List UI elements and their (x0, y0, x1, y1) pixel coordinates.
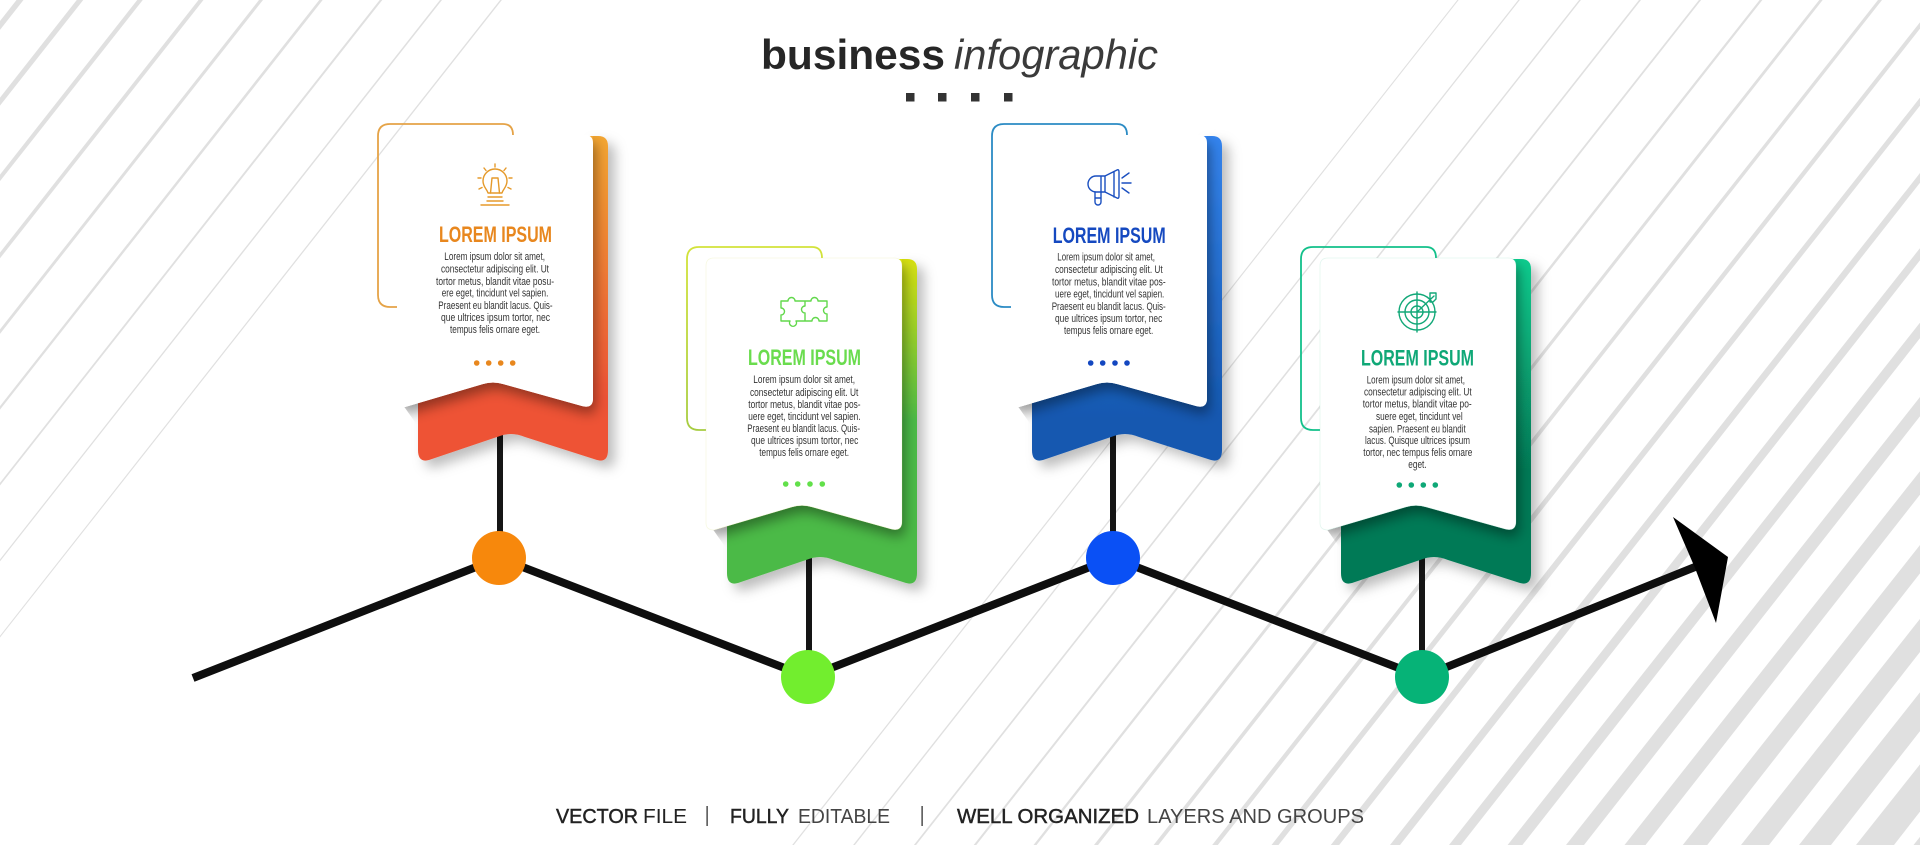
dots 4 (1396, 482, 1438, 488)
card 2 shadow on ribbon (706, 258, 902, 530)
footer text: WELL ORGANIZED (957, 806, 1139, 828)
card 4 shadow on ribbon (1320, 258, 1516, 530)
body text 2: tortor metus, blandit vitae pos- (748, 399, 861, 411)
icon: light bulb (478, 164, 512, 205)
body text 4: Lorem ipsum dolor sit amet, (1367, 374, 1465, 386)
icon: puzzle (781, 298, 827, 326)
card 3 shadow on ribbon (1011, 135, 1207, 407)
title: infographic (954, 31, 1158, 78)
ribbon 1 (418, 136, 608, 461)
node 2 (781, 650, 835, 704)
footer text: EDITABLE (798, 806, 890, 828)
connector stem 2 (806, 553, 812, 663)
body text 3: tortor metus, blandit vitae pos- (1052, 277, 1166, 289)
body text 1: tortor metus, blandit vitae posu- (436, 276, 554, 288)
white card 2 (706, 258, 902, 530)
heading 1: LOREM IPSUM (439, 222, 552, 247)
body text 4: tortor, nec tempus felis ornare (1363, 447, 1472, 459)
panel: step 3 blue (992, 124, 1222, 585)
body text 2: Praesent eu blandit lacus. Quis- (747, 423, 860, 435)
title dots (906, 93, 1012, 102)
footer text: FILE (643, 806, 687, 828)
body text 3: Praesent eu blandit lacus. Quis- (1052, 301, 1166, 313)
dots 2 (783, 481, 825, 487)
body text 2 (747, 374, 861, 459)
white card 1 (397, 135, 593, 407)
outline frame 1 (378, 124, 513, 307)
node 3 (1086, 531, 1140, 585)
timeline zigzag line (193, 558, 1695, 678)
body text 4: suere eget, tincidunt vel (1376, 411, 1463, 423)
outline frame 4 (1301, 247, 1436, 430)
outline frame 2 (687, 247, 822, 430)
card 1 shadow on ribbon (397, 135, 593, 407)
heading 4: LOREM IPSUM (1361, 346, 1474, 371)
body text 1: Praesent eu blandit lacus. Quis- (438, 300, 553, 312)
body text 2: tempus felis ornare eget. (759, 447, 849, 459)
node 1 (472, 531, 526, 585)
footer text: VECTOR (556, 806, 638, 828)
ribbon 2 (727, 259, 917, 584)
white card 3 (1011, 135, 1207, 407)
footer text: LAYERS AND GROUPS (1147, 806, 1364, 828)
panel: step 1 orange (378, 124, 608, 585)
body text 4: tortor metus, blandit vitae po- (1363, 399, 1472, 411)
connector stem 3 (1110, 430, 1116, 540)
body text 4 (1363, 374, 1472, 471)
ribbon 3 (1032, 136, 1222, 461)
body text 3: consectetur adipiscing elit. Ut (1055, 264, 1163, 276)
body text 1: tempus felis ornare eget. (450, 324, 540, 336)
body text 4: eget. (1408, 459, 1427, 471)
footer text: FULLY (730, 806, 789, 828)
heading 3: LOREM IPSUM (1053, 223, 1166, 248)
body text 1: Lorem ipsum dolor sit amet, (444, 251, 545, 263)
body text 2: Lorem ipsum dolor sit amet, (753, 374, 855, 386)
icon: target (1398, 292, 1436, 332)
body text 2: uere eget, tincidunt vel sapien. (748, 411, 861, 423)
outline frame 3 (992, 124, 1127, 307)
body text 4: consectetur adipiscing elit. Ut (1364, 387, 1472, 399)
body text 1: ere eget, tincidunt vel sapien. (442, 288, 548, 300)
node 4 (1395, 650, 1449, 704)
body text 2: consectetur adipiscing elit. Ut (750, 387, 858, 399)
body text 3 (1052, 252, 1166, 337)
body text 1: consectetur adipiscing elit. Ut (441, 263, 549, 275)
body text 2: que ultrices ipsum tortor, nec (751, 435, 859, 447)
body text 4: lacus. Quisque ultrices ipsum (1365, 435, 1470, 447)
title (761, 31, 1158, 78)
panel: step 4 teal (1301, 247, 1531, 704)
body text 3: uere eget, tincidunt vel sapien. (1055, 289, 1164, 301)
body text 3: tempus felis ornare eget. (1064, 325, 1153, 337)
body text 1: que ultrices ipsum tortor, nec (441, 312, 550, 324)
connector stem 4 (1419, 553, 1425, 663)
icon: megaphone (1088, 170, 1131, 205)
dots 3 (1088, 360, 1130, 366)
dots 1 (474, 360, 516, 366)
panel: step 2 green (687, 247, 917, 704)
heading 2: LOREM IPSUM (748, 345, 861, 370)
body text 3: Lorem ipsum dolor sit amet, (1057, 252, 1155, 264)
footer text (556, 806, 1364, 828)
arrow head (1673, 517, 1728, 623)
body text 3: que ultrices ipsum tortor, nec (1055, 313, 1163, 325)
connector stem 1 (497, 430, 503, 540)
white card 4 (1320, 258, 1516, 530)
title: business (761, 31, 945, 78)
body text 4: sapien. Praesent eu blandit (1369, 423, 1466, 435)
ribbon 4 (1341, 259, 1531, 584)
body text 1 (436, 251, 554, 336)
